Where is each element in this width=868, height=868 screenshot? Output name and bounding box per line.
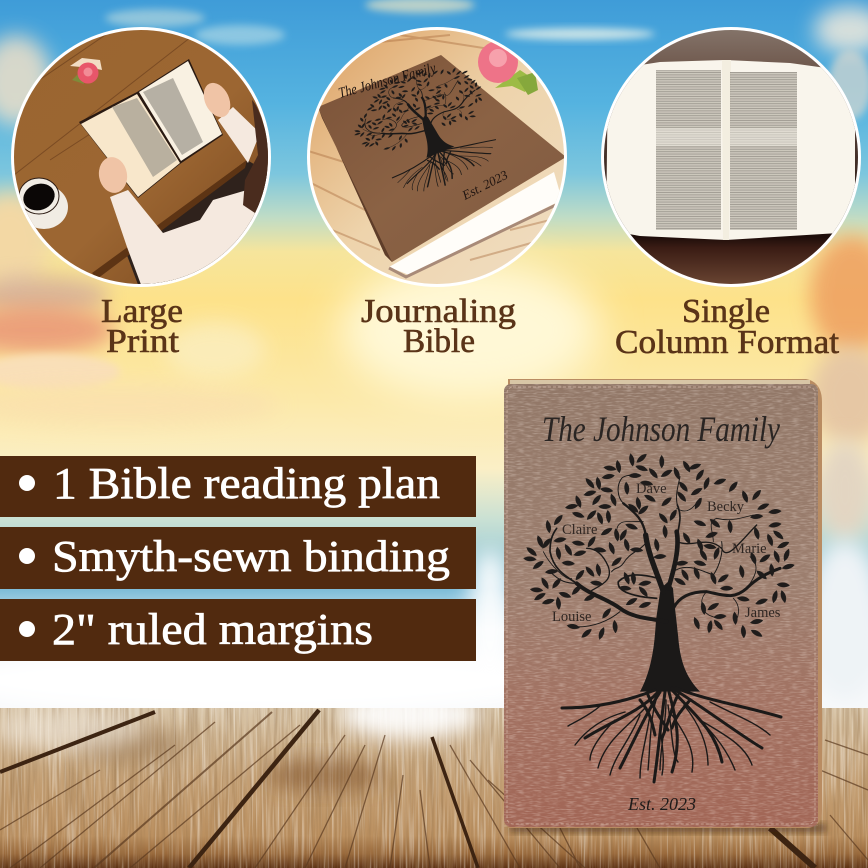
shadow: [510, 824, 826, 832]
hair: [243, 100, 268, 213]
cover title: The Johnson Family: [542, 409, 780, 449]
caption: single column format: Column Format: [615, 324, 840, 361]
caption: large print: Print: [106, 323, 180, 360]
rose: [70, 58, 102, 84]
caption: single column format: Single: [682, 293, 770, 330]
feature bar: binding: [0, 527, 476, 589]
family names: Dave: [636, 481, 667, 497]
leather journal: The Johnson Family: [337, 60, 438, 102]
text columns: [656, 70, 797, 230]
open book: [79, 59, 223, 198]
family names: Louise: [552, 609, 591, 625]
feature bar: reading plan: [0, 456, 476, 517]
family names: Marie: [732, 541, 767, 557]
caption: journaling bible: Bible: [403, 323, 475, 360]
sweater: [110, 107, 260, 290]
coffee cup: [19, 178, 68, 229]
family names: [552, 481, 781, 625]
established date: Est. 2023: [627, 794, 696, 814]
feature bar: margins: [0, 599, 476, 661]
circle photo: large print: [10, 25, 272, 290]
tree of life: [524, 452, 795, 782]
leather journal: [318, 49, 566, 277]
caption: journaling bible: Journaling: [361, 293, 516, 330]
leather journal: Est. 2023: [459, 167, 511, 203]
circle photo: single column pages: [600, 25, 862, 290]
rose: [478, 41, 538, 95]
hands: [98, 82, 230, 193]
family names: Becky: [707, 499, 745, 515]
caption: large print: Large: [101, 293, 183, 330]
leather cover: [504, 384, 818, 827]
bible product: [504, 379, 826, 832]
page edges: [508, 379, 822, 828]
family names: James: [745, 605, 781, 621]
feature bar: binding: Smyth-sewn binding: [52, 532, 450, 581]
feature bar: margins: 2" ruled margins: [52, 605, 373, 654]
feature bar: reading plan: 1 Bible reading plan: [53, 459, 440, 508]
circle photo: journaling bible: [305, 25, 570, 290]
family names: Claire: [562, 522, 597, 538]
wooden deck: [0, 691, 868, 868]
